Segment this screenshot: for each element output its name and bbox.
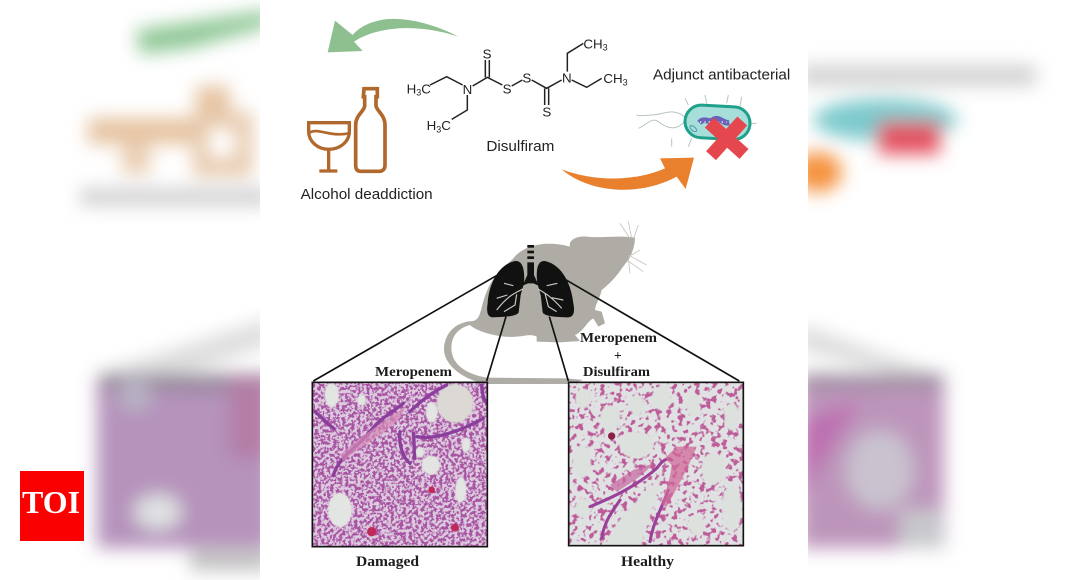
top section: disulfiram uses <box>301 19 790 203</box>
chemical structure: disulfiram: 3 <box>436 124 441 134</box>
chemical structure: disulfiram: 3 <box>603 43 608 53</box>
arrow: green, to alcohol deaddiction <box>328 19 458 52</box>
chemical structure: disulfiram: 3 <box>416 88 421 98</box>
histology: healthy lung <box>569 382 743 546</box>
logo: TOI: TOI <box>22 484 80 520</box>
label: meropenem plus disulfiram: Meropenem <box>580 330 658 345</box>
border: damaged panel <box>312 382 487 547</box>
chemical structure: disulfiram: H <box>407 81 416 96</box>
logo: TOI <box>20 471 84 541</box>
chemical structure: disulfiram: 3 <box>623 77 628 87</box>
chemical structure: disulfiram: S <box>503 81 512 96</box>
histology panels <box>312 382 743 547</box>
zoom lines <box>313 272 739 381</box>
label: disulfiram: Disulfiram <box>486 139 554 155</box>
chemical structure: disulfiram: S <box>542 105 551 120</box>
icon: bacterium crossed out <box>637 95 760 171</box>
label: meropenem plus disulfiram: Disulfiram <box>583 364 651 379</box>
label: meropenem plus disulfiram: + <box>614 348 622 363</box>
chemical structure: disulfiram: N <box>562 70 572 85</box>
chemical structure: disulfiram: C <box>441 118 451 133</box>
border: healthy panel <box>569 382 743 546</box>
chemical structure: disulfiram: CH <box>583 36 603 51</box>
icon: lungs <box>487 245 574 317</box>
chemical structure: disulfiram: C <box>421 81 431 96</box>
label: meropenem: Meropenem <box>375 364 453 379</box>
chemical structure: disulfiram: H <box>427 118 436 133</box>
caption: healthy: Healthy <box>621 554 675 570</box>
label: adjunct antibacterial: Adjunct antibacterial <box>653 67 790 83</box>
caption: damaged: Damaged <box>356 554 420 570</box>
central white figure panel <box>260 0 808 580</box>
chemical structure: disulfiram: CH <box>603 71 623 86</box>
histology: damaged lung <box>312 382 487 547</box>
chemical structure: disulfiram: S <box>522 70 531 85</box>
arrow: orange, to antibacterial <box>562 158 694 190</box>
label: meropenem plus disulfiram <box>580 330 658 379</box>
chemical structure: disulfiram: S <box>483 46 492 61</box>
label: alcohol deaddiction: Alcohol deaddiction <box>301 187 433 203</box>
rat silhouette <box>444 222 647 384</box>
chemical structure: disulfiram: N <box>463 82 472 97</box>
chemical structure: disulfiram <box>407 36 628 134</box>
rat with lungs and zoom lines <box>313 222 739 384</box>
icon: wine glass and bottle <box>309 89 385 171</box>
